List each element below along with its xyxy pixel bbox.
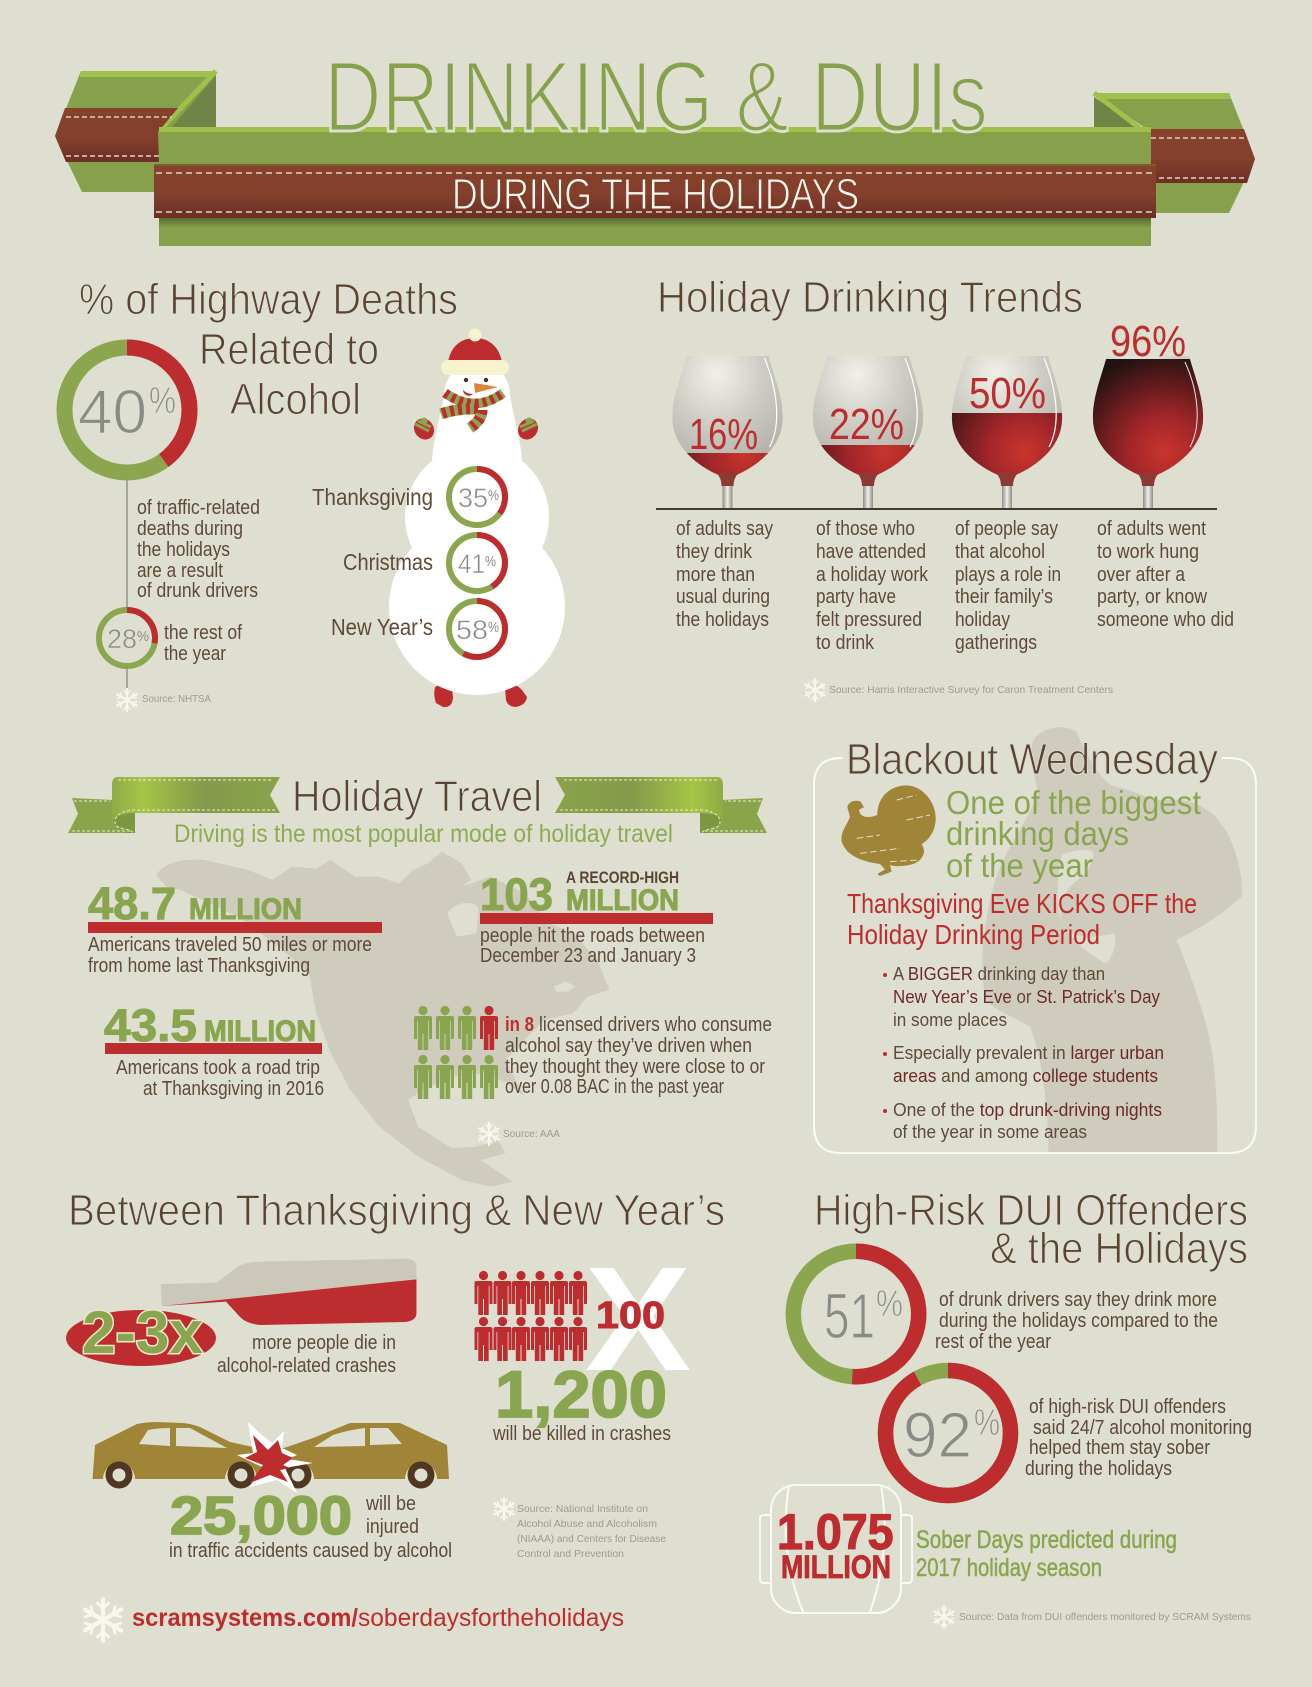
text: 51%: rest of the year [935,1331,1051,1353]
caption: 96%: of adults went [1097,518,1206,540]
caption: 50%: their family’s [955,586,1053,608]
subheading: biggest drinking days: of the year [946,847,1093,884]
donut: 92%: 92 [903,1399,972,1471]
bullet: urban areas: areas and among college students [893,1065,1158,1086]
text: 92%: helped them stay sober [1029,1437,1210,1459]
donut: New Year's 58%: % [488,619,499,636]
pictogram: 12 people [474,1271,587,1361]
source: AAA: Source: AAA [503,1128,560,1140]
donut: Thanksgiving 35%: % [488,487,499,504]
stat: 103 million: A RECORD-HIGH [566,868,679,887]
heading: highway deaths [79,275,458,424]
panel: holiday travel [68,772,772,1187]
left ribbon tail [55,71,216,192]
snowman labels: New Year’s [331,614,433,640]
heading: high-risk offenders [814,1186,1248,1273]
text: traffic-related deaths: the holidays [137,539,230,561]
donut: Thanksgiving 35% [449,469,505,525]
donut: 28%: % [137,628,149,645]
donut: 51%: 51 [824,1280,875,1352]
bullet: bigger drinking day: A BIGGER drinking day than [893,963,1105,984]
snowman mittens [410,415,542,443]
text: traffic-related deaths: deaths during [137,518,243,540]
map of North America [156,852,610,1187]
caption: 96%: someone who did [1097,609,1234,631]
multiplier: 100: 100 [596,1295,665,1337]
left car [92,1422,262,1488]
main green panel [159,127,1151,246]
wine glass 22%: 22% [829,400,904,449]
bullet: bigger drinking day: in some places [893,1009,1007,1030]
text: will be injured [169,1493,452,1562]
callout: Thanksgiving Eve: Thanksgiving Eve KICKS OFF the [847,888,1197,919]
stat: 48.7 million: Americans traveled 50 miles or more [88,934,372,956]
donut: New Year's 58%: 58 [456,615,488,645]
text: will be killed: will be killed in crashes [492,1423,671,1445]
left ribbon [68,777,280,833]
bullet: drunk-driving nights [883,1099,1162,1142]
snowman body [389,362,565,695]
stat: 43.5 million: 43.5 [104,1000,197,1051]
text: traffic-related deaths: of traffic-related [137,497,260,519]
snowman hat [441,328,509,375]
crash star [237,1422,313,1493]
text: 1 in 8 drivers: they thought they were close to or [505,1056,765,1078]
text: rest of the year: the year [164,643,226,665]
donut: Thanksgiving 35%: 35 [458,483,488,513]
snowman scarf [441,393,503,428]
caption: 50%: that alcohol [955,541,1045,563]
bullet: urban areas [883,1042,1164,1086]
heading: drinking trends: Holiday Drinking Trends [657,273,1083,322]
wine glass 22% [812,356,924,509]
caption: 50%: holiday [955,609,1010,631]
stat: 103 million: 103 [480,869,553,920]
wine glass 50% [951,356,1063,509]
wine glass 96% [1092,317,1204,509]
website link: soberdaysfortheholidays [358,1604,624,1632]
caption: 22% [816,518,929,654]
callout: Thanksgiving Eve [847,888,1197,950]
text: traffic-related deaths: are a result [137,560,223,582]
snowman face [463,378,498,396]
source: NHTSA: Source: NHTSA [142,693,211,705]
heading: high-risk offenders: & the Holidays [990,1224,1248,1273]
text: traffic-related deaths [137,497,260,602]
text: rest of the year [164,622,242,665]
bullet: bigger drinking day: New Year’s Eve or St. Patrick’s Day [893,986,1161,1007]
caption: 50%: gatherings [955,632,1037,654]
caption: 22%: felt pressured [816,609,922,631]
text: sober days [916,1526,1177,1582]
text: sober days: Sober Days predicted during [916,1526,1177,1554]
heading: highway deaths: Alcohol [230,375,361,424]
source: NIAAA: Control and Prevention [517,1548,624,1560]
panel: between Thanksgiving and New Year's [66,1186,725,1641]
donut: New Year's 58% [449,601,505,657]
text: 1 in 8 drivers: licensed drivers who consume [539,1014,772,1036]
text: 1 in 8 drivers: in 8 [505,1014,534,1036]
shelf line [656,508,1217,510]
stat: 103 million: MILLION [566,884,679,917]
text: 1 in 8 drivers: over 0.08 BAC in the past year [505,1076,724,1098]
text: rest of the year: the rest of [164,622,242,644]
text: 1 in 8 drivers [505,1014,772,1098]
stat: 48.7 million [88,878,382,977]
text: 92%: during the holidays [1025,1458,1172,1480]
donut: Christmas 41%: % [485,553,496,570]
donut: 28% [99,610,155,666]
heading: highway deaths: % of Highway Deaths [79,275,458,324]
caption: 22%: party have [816,586,896,608]
caption: 50% [955,518,1061,654]
brown band [154,164,1156,218]
heading: high-risk offenders: High-Risk DUI Offenders [814,1186,1248,1235]
bullet: drunk-driving nights: One of the top drunk-driving nights [893,1099,1162,1120]
silhouette of drinker [982,727,1242,1153]
stat: 43.5 million [104,1000,324,1100]
donut: Christmas 41%: 41 [458,549,485,579]
donut: 51%: % [876,1283,903,1324]
caption: 16% [676,518,773,631]
bullet list [883,963,1164,1142]
source: NHTSA [118,689,211,711]
wine glass 50%: 50% [969,369,1046,418]
caption: 16%: of adults say [676,518,773,540]
caption: 22%: to drink [816,632,875,654]
donut: 28%: 28 [107,624,137,654]
snowman feet [434,685,527,707]
icon: SCRAM bracelet device [760,1485,912,1613]
right car [276,1423,449,1488]
text: sober days: 2017 holiday season [916,1554,1102,1582]
subheading: biggest drinking days: One of the biggest [946,784,1201,821]
donut: Christmas 41% [449,535,505,591]
subheading: biggest drinking days: drinking days [946,815,1129,852]
website link: scramsystems.com/ [132,1604,358,1632]
caption: 16%: more than [676,564,755,586]
text: 51%: during the holidays compared to the [939,1310,1218,1332]
donut: 92%: % [974,1402,1000,1443]
caption: 16%: usual during [676,586,770,608]
panel: highway deaths [64,275,458,711]
stat: 103 million: people hit the roads between [480,925,705,947]
wine glass 96%: 96% [1110,317,1186,366]
source: SCRAM: Source: Data from DUI offenders monitored by SCRAM Systems [959,1611,1251,1623]
caption: 96%: party, or know [1097,586,1207,608]
bullet: urban areas: Especially prevalent in larger urban [893,1042,1164,1063]
pictogram: 1 in 8 drivers [414,1006,498,1099]
stat: 103 million: December 23 and January 3 [480,945,696,967]
snowman labels: Christmas [343,549,433,575]
subtitle: DURING THE HOLIDAYS [452,170,859,219]
header banner [55,71,1255,246]
panel: holiday drinking trends [656,273,1234,701]
caption: 16%: they drink [676,541,753,563]
stat: 1.075 million [777,1504,894,1585]
caption: 16%: the holidays [676,609,769,631]
right ribbon [555,777,767,833]
panel: high-risk DUI offenders [760,1186,1252,1628]
caption: 22%: have attended [816,541,926,563]
text: more people die: more people die in [252,1332,396,1354]
text: 51%: of drunk drivers say they drink more [939,1289,1217,1311]
stat: 43.5 million: MILLION [204,1015,316,1048]
heading: between holidays: Between Thanksgiving & New Year’s [68,1186,725,1235]
text: more people die [217,1332,396,1377]
caption: 50%: of people say [955,518,1058,540]
stat: 43.5 million: at Thanksgiving in 2016 [143,1078,324,1100]
caption: 96% [1097,518,1234,631]
text: will be injured: will be [365,1493,416,1515]
heading: blackout wednesday: Blackout Wednesday [846,735,1218,784]
source: NIAAA [494,1498,666,1560]
donut: 40%: % [149,380,176,421]
donut: 40%: 40 [78,378,147,447]
caption: 50%: plays a role in [955,564,1061,586]
text: 92% [1025,1396,1252,1480]
snowman labels: Thanksgiving [312,484,433,510]
caption: 22%: a holiday work [816,564,929,586]
icon: car crash [92,1422,449,1493]
caption: 22%: of those who [816,518,915,540]
text: 51% [935,1289,1218,1353]
caption: 96%: to work hung [1097,541,1199,563]
source: NIAAA: Source: National Institute on [517,1503,648,1515]
snowman labels [312,484,433,640]
wine glass 16%: 16% [689,410,758,459]
text: more people die: alcohol-related crashes [217,1355,396,1377]
text: traffic-related deaths: of drunk drivers [137,580,258,602]
donut: 92% [886,1370,1010,1496]
donut: 51% [793,1251,919,1377]
stat: 1.075 million: MILLION [781,1549,891,1585]
snowman [312,328,565,707]
stat: 48.7 million: MILLION [189,893,302,926]
icon: turkey [841,785,936,876]
website link [85,1599,624,1641]
source: Harris [806,679,1113,701]
source: Harris: Source: Harris Interactive Survey for Caron Treatment Centers [829,684,1113,696]
stat: 1.075 million: 1.075 [777,1504,894,1560]
stat: 48.7 million: 48.7 [88,878,176,929]
white X: X [585,1237,691,1402]
right ribbon tail [1094,93,1255,213]
panel: blackout wednesday [814,727,1256,1153]
source: SCRAM [934,1606,1251,1628]
title: DRINKING & DUIs [324,41,988,153]
heading: highway deaths: Related to [199,325,379,374]
stat: 48.7 million: from home last Thanksgiving [88,955,310,977]
wine glass 16% [672,356,784,509]
text: 1 in 8 drivers: alcohol say they’ve driven when [505,1035,752,1057]
text: 92%: of high-risk DUI offenders [1029,1396,1226,1418]
rounded frame [814,758,1256,1153]
text: will be injured: in traffic accidents caused by alcohol [169,1540,452,1562]
callout: Thanksgiving Eve: Holiday Drinking Period [847,919,1100,950]
source: AAA [480,1123,560,1145]
stat: 43.5 million: Americans took a road trip [116,1057,320,1079]
source: NIAAA: (NIAAA) and Centers for Disease [517,1533,666,1545]
stat: 2-3x: 2-3x [82,1299,203,1366]
caption: 96%: over after a [1097,564,1186,586]
stat: 25,000: 25,000 [170,1486,352,1546]
stat: 103 million [480,868,713,967]
icon: tipped bottle [161,1259,416,1325]
donut: 40% [64,348,190,472]
text: 92%: said 24/7 alcohol monitoring [1033,1417,1252,1439]
stat: 1,200: 1,200 [495,1357,667,1431]
bullet: bigger drinking day [883,963,1161,1030]
heading: holiday travel: Holiday Travel [292,772,542,821]
text: will be injured: injured [366,1516,419,1538]
bullet: drunk-driving nights: of the year in some areas [893,1121,1087,1142]
source: NIAAA: Alcohol Abuse and Alcoholism [517,1518,657,1530]
subheading: biggest drinking days [946,784,1201,884]
subheading: Driving is the most popular mode of holiday travel [174,820,673,848]
connector line [126,480,128,690]
